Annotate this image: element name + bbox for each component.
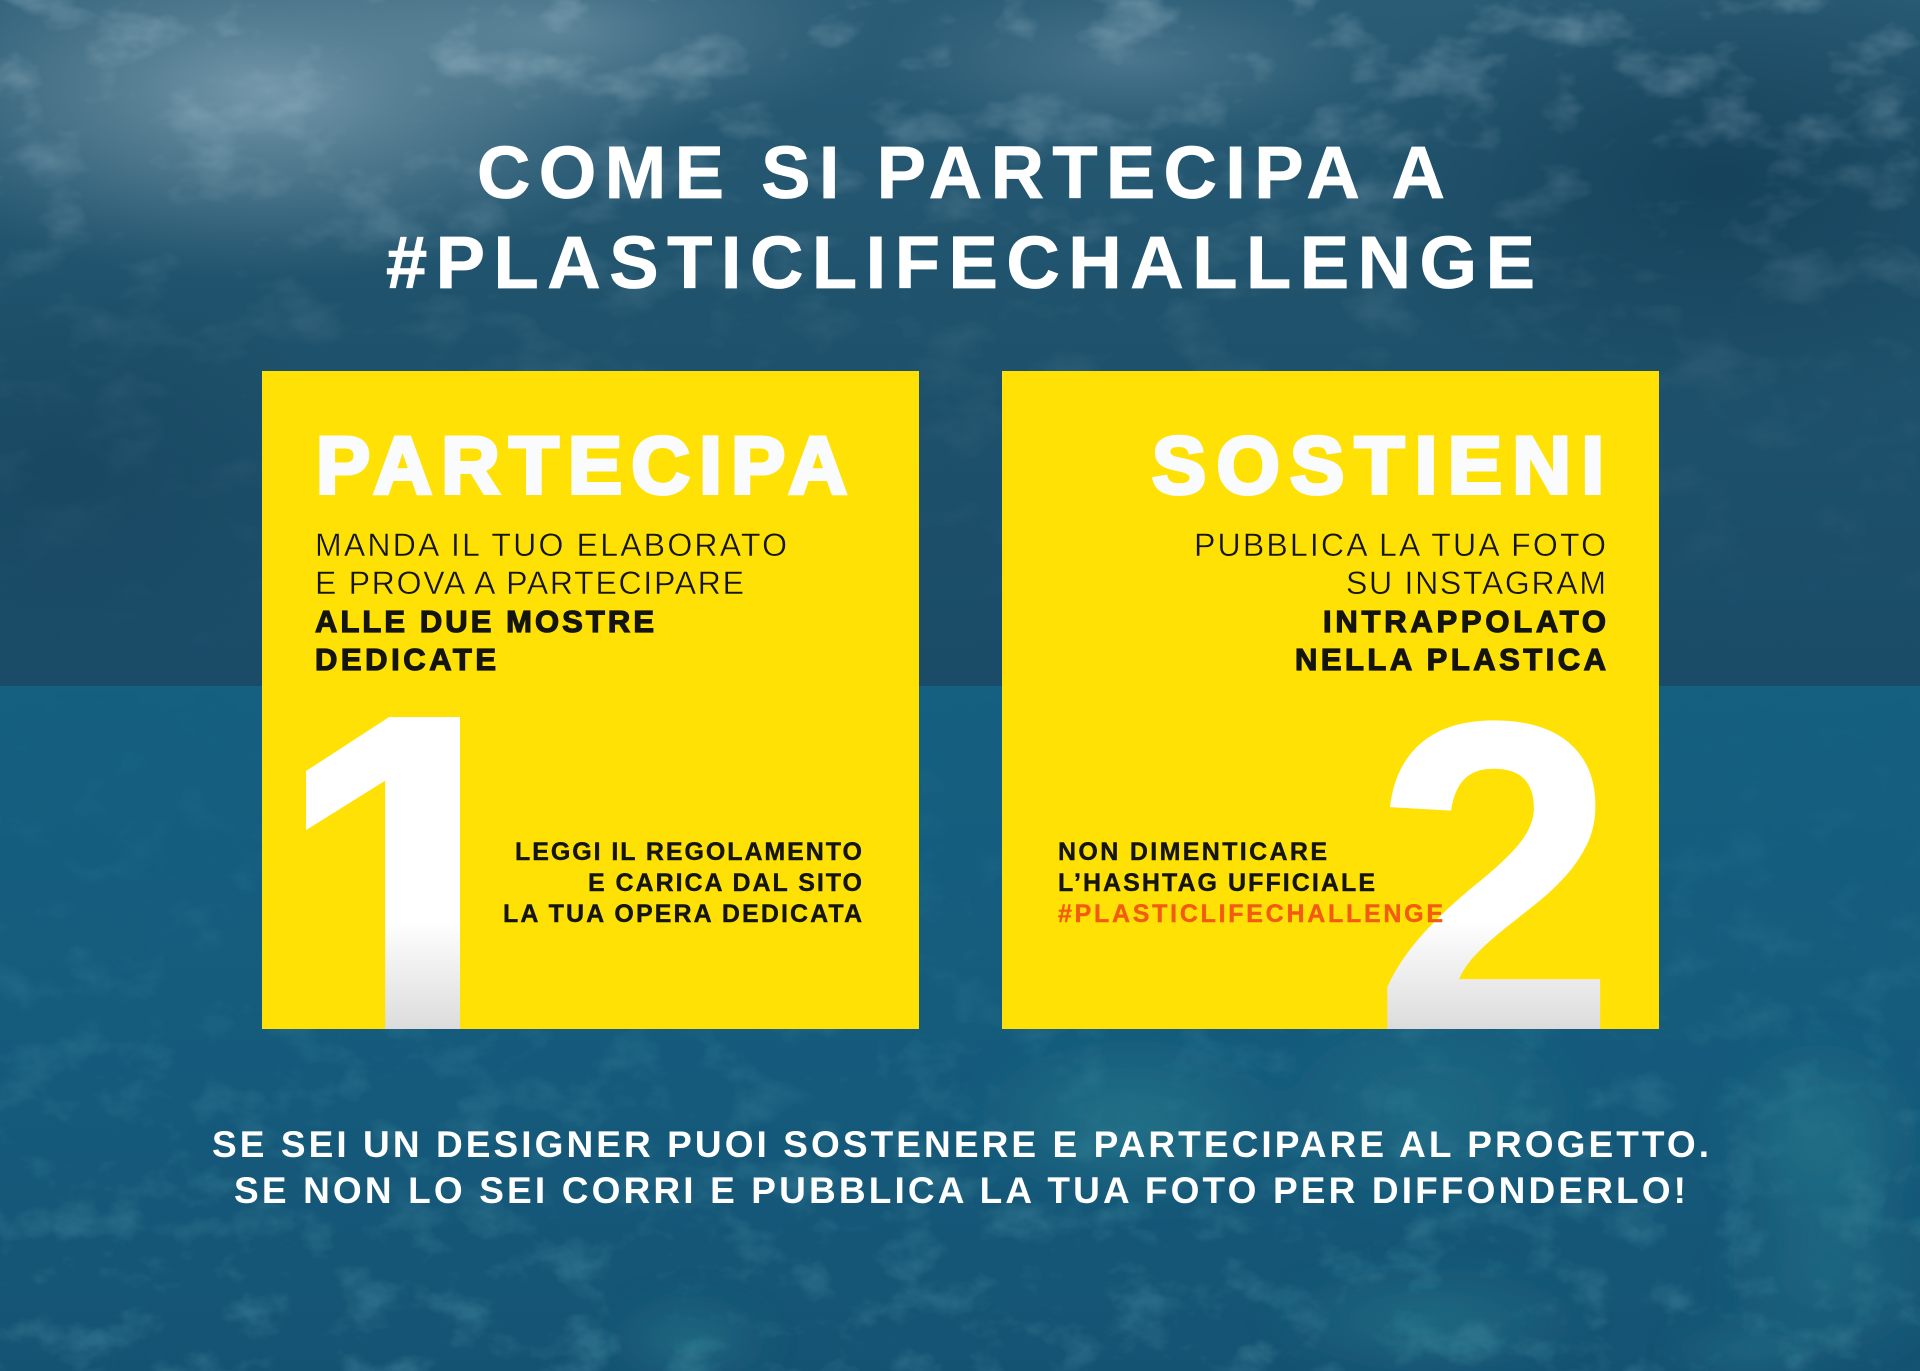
text block: non dimenticare <box>1058 838 1443 928</box>
title: COME SI PARTECIPA A <box>477 131 1445 214</box>
panel: partecipa <box>258 371 919 1208</box>
panel: sostieni <box>1002 371 1659 1123</box>
number 1: 1 <box>258 600 561 1208</box>
text block: manda il tuo elaborato: MANDA IL TUO ELABORATO <box>315 527 787 563</box>
text block: leggi il regolamento: LA TUA OPERA DEDICATA <box>503 900 862 928</box>
text block: leggi il regolamento <box>503 838 862 928</box>
title <box>386 131 1535 304</box>
heading: sostieni: SOSTIENI <box>1152 421 1604 511</box>
text block: manda il tuo elaborato: DEDICATE <box>315 642 496 677</box>
text block: pubblica la tua foto <box>1194 527 1606 677</box>
text block: pubblica la tua foto: SU INSTAGRAM <box>1346 565 1606 601</box>
text block: pubblica la tua foto: PUBBLICA LA TUA FOTO <box>1194 527 1606 563</box>
heading: partecipa: PARTECIPA <box>316 421 847 511</box>
text block: manda il tuo elaborato <box>315 527 787 677</box>
number 2: 2 <box>1372 629 1618 1123</box>
hashtag: #PLASTICLIFECHALLENGE <box>1058 900 1443 928</box>
text block: non dimenticare: NON DIMENTICARE <box>1058 838 1327 866</box>
text block: non dimenticare: L’HASHTAG UFFICIALE <box>1058 869 1375 897</box>
text block: manda il tuo elaborato: ALLE DUE MOSTRE <box>315 604 654 639</box>
text block: manda il tuo elaborato: E PROVA A PARTECIPARE <box>315 565 744 601</box>
title: #PLASTICLIFECHALLENGE <box>386 221 1535 304</box>
footer text: SE SEI UN DESIGNER PUOI SOSTENERE E PARTECIPARE AL PROGETTO. <box>212 1124 1709 1165</box>
text block: leggi il regolamento: E CARICA DAL SITO <box>588 869 862 897</box>
text block: pubblica la tua foto: NELLA PLASTICA <box>1295 642 1606 677</box>
footer text: SE NON LO SEI CORRI E PUBBLICA LA TUA FOTO PER DIFFONDERLO! <box>234 1170 1686 1211</box>
text block: pubblica la tua foto: INTRAPPOLATO <box>1323 604 1606 639</box>
footer text <box>212 1124 1709 1211</box>
text block: leggi il regolamento: LEGGI IL REGOLAMENTO <box>515 838 862 866</box>
